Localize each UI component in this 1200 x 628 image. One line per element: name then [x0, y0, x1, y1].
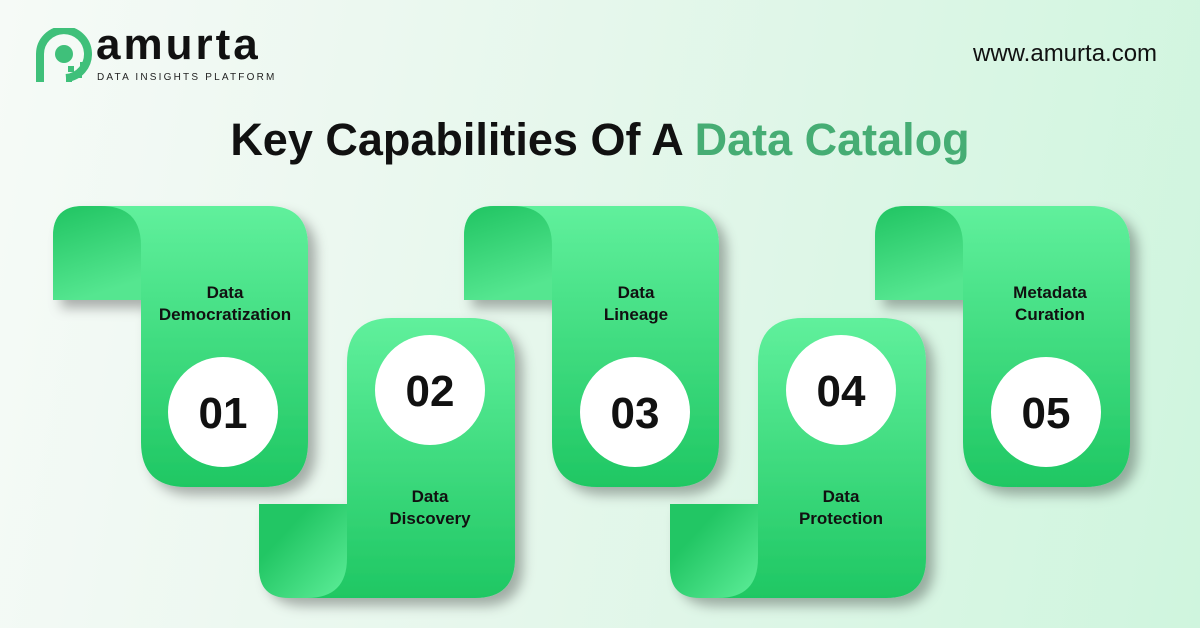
card 03: [464, 206, 719, 487]
card 01: 01: [199, 389, 247, 438]
card 05: Metadata: [1013, 283, 1087, 302]
card 01: [53, 206, 308, 487]
card 04: [670, 318, 926, 598]
card 03: 03: [611, 389, 659, 438]
title: Key Capabilities Of A Data Catalog: [230, 114, 970, 165]
card 05: Curation: [1015, 305, 1085, 324]
card 03: Lineage: [604, 305, 668, 324]
logo wordmark: amurta: [96, 20, 261, 69]
card 02: [259, 318, 515, 598]
card 05: 05: [1022, 389, 1070, 438]
card 01: Democratization: [159, 305, 291, 324]
card 04: Data: [823, 487, 860, 506]
card 04: 04: [817, 367, 866, 416]
card 02: 02: [406, 367, 454, 416]
card 04: Protection: [799, 509, 883, 528]
card 02: Data: [412, 487, 449, 506]
logo: [36, 20, 277, 83]
logo tagline: DATA INSIGHTS PLATFORM: [97, 72, 277, 83]
icon: logo mark: [36, 28, 92, 82]
card 02: Discovery: [389, 509, 471, 528]
card 01: Data: [207, 283, 244, 302]
card 05: [875, 206, 1130, 487]
card 03: Data: [618, 283, 655, 302]
website url: www.amurta.com: [973, 40, 1157, 67]
